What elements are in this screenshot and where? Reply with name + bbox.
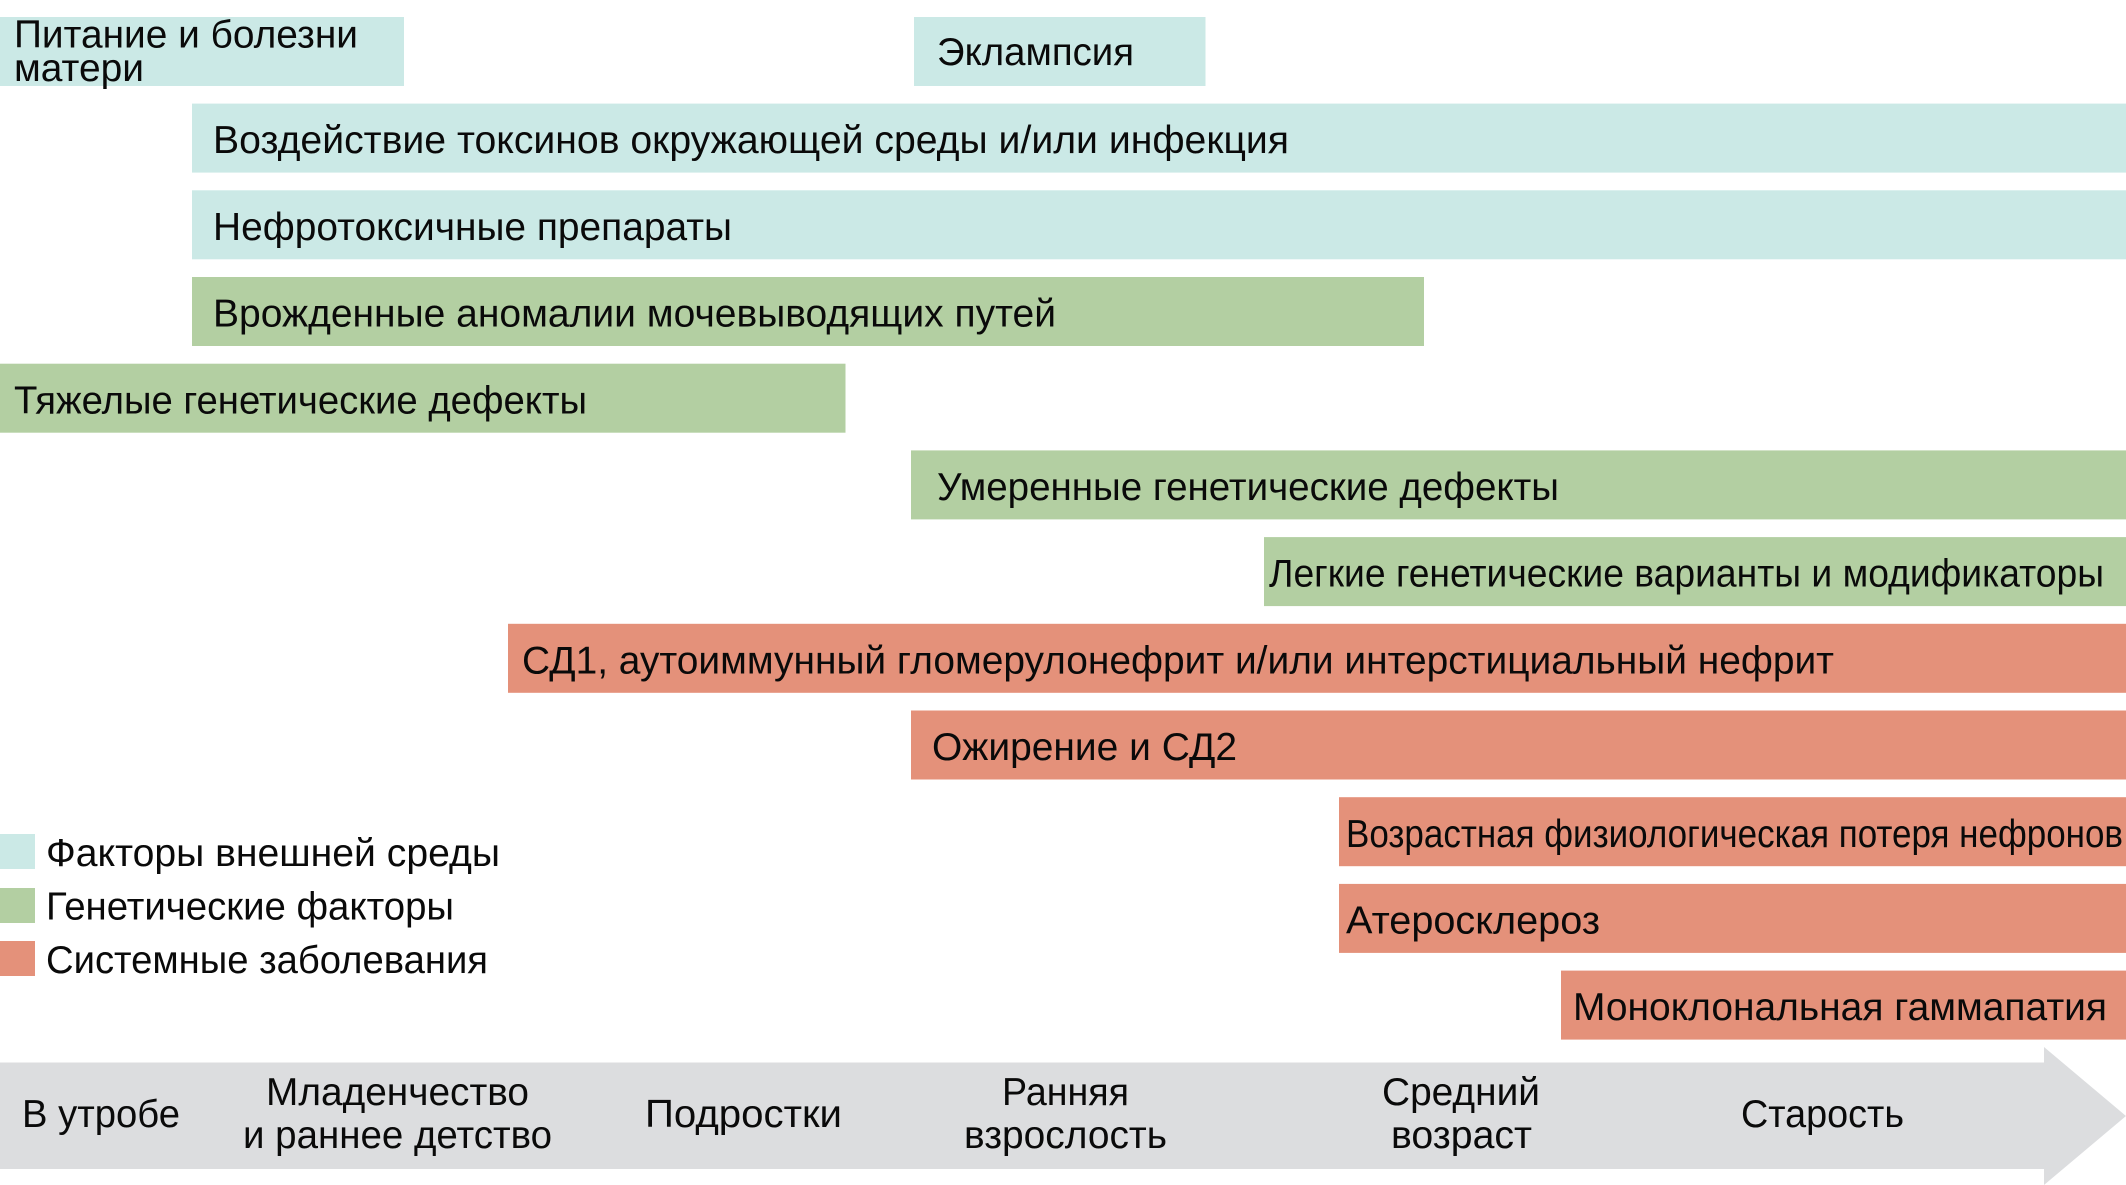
legend item: systemic diseases: Системные заболевания <box>46 939 488 982</box>
bar: monoclonal gammopathy: Моноклональная гаммапатия <box>1573 986 2107 1029</box>
bar: maternal nutrition and disease <box>0 14 404 90</box>
timeline arrow <box>0 1047 2126 1185</box>
bar: eclampsia <box>914 17 1206 86</box>
timeline label: old age: Старость <box>1741 1093 1904 1136</box>
bar: obesity and type 2 diabetes <box>911 710 2126 780</box>
bar: congenital urinary anomalies <box>192 277 1424 346</box>
timeline label: adolescents: Подростки <box>645 1093 842 1136</box>
bar: maternal nutrition and disease: матери <box>14 47 144 90</box>
bar: maternal nutrition and disease: Питание и болезни <box>14 14 358 56</box>
timeline label: early adulthood: взрослость <box>964 1114 1167 1157</box>
timeline label: early adulthood <box>964 1071 1167 1157</box>
timeline label: early adulthood: Ранняя <box>1002 1071 1129 1114</box>
timeline label: middle age <box>1382 1071 1540 1157</box>
bar: mild genetic variants and modifiers: Легкие генетические варианты и модификаторы <box>1269 553 2104 596</box>
bar: eclampsia: Эклампсия <box>937 31 1134 74</box>
bar: nephrotoxic drugs: Нефротоксичные препараты <box>213 206 732 249</box>
legend <box>0 832 500 982</box>
bar: severe genetic defects <box>0 364 846 433</box>
bar: type 1 diabetes, autoimmune glomerulonephritis, interstitial nephritis <box>508 624 2126 693</box>
timeline label: in utero: В утробе <box>22 1093 180 1136</box>
bar: atherosclerosis: Атеросклероз <box>1346 900 1600 942</box>
timeline label: infancy and early childhood: Младенчество <box>266 1071 529 1114</box>
bar: obesity and type 2 diabetes: Ожирение и СД2 <box>932 726 1237 769</box>
bar: environmental toxins or infection <box>192 104 2126 173</box>
bar: moderate genetic defects <box>911 450 2126 519</box>
legend item: genetic factors: Генетические факторы <box>46 886 454 928</box>
timeline label: middle age: Средний <box>1382 1071 1540 1114</box>
timeline label: infancy and early childhood <box>243 1071 552 1157</box>
bar: severe genetic defects: Тяжелые генетические дефекты <box>14 379 587 422</box>
bar: mild genetic variants and modifiers <box>1264 537 2126 606</box>
bar: type 1 diabetes, autoimmune glomerulonephritis, interstitial nephritis: СД1, аутоиммунный гломерулонефрит и/или интерстициальный нефрит <box>522 639 1834 682</box>
bar: atherosclerosis <box>1339 884 2126 953</box>
bar: moderate genetic defects: Умеренные генетические дефекты <box>937 466 1559 509</box>
bar: age-related nephron loss <box>1339 797 2126 866</box>
legend item: environmental factors: Факторы внешней среды <box>46 832 500 875</box>
bar: environmental toxins or infection: Воздействие токсинов окружающей среды и/или инфекция <box>213 119 1289 162</box>
timeline label: infancy and early childhood: и раннее детство <box>243 1114 552 1157</box>
bar: congenital urinary anomalies: Врожденные аномалии мочевыводящих путей <box>213 293 1056 336</box>
bar: nephrotoxic drugs <box>192 190 2126 259</box>
bar: monoclonal gammopathy <box>1561 971 2126 1040</box>
timeline label: middle age: возраст <box>1391 1114 1532 1157</box>
